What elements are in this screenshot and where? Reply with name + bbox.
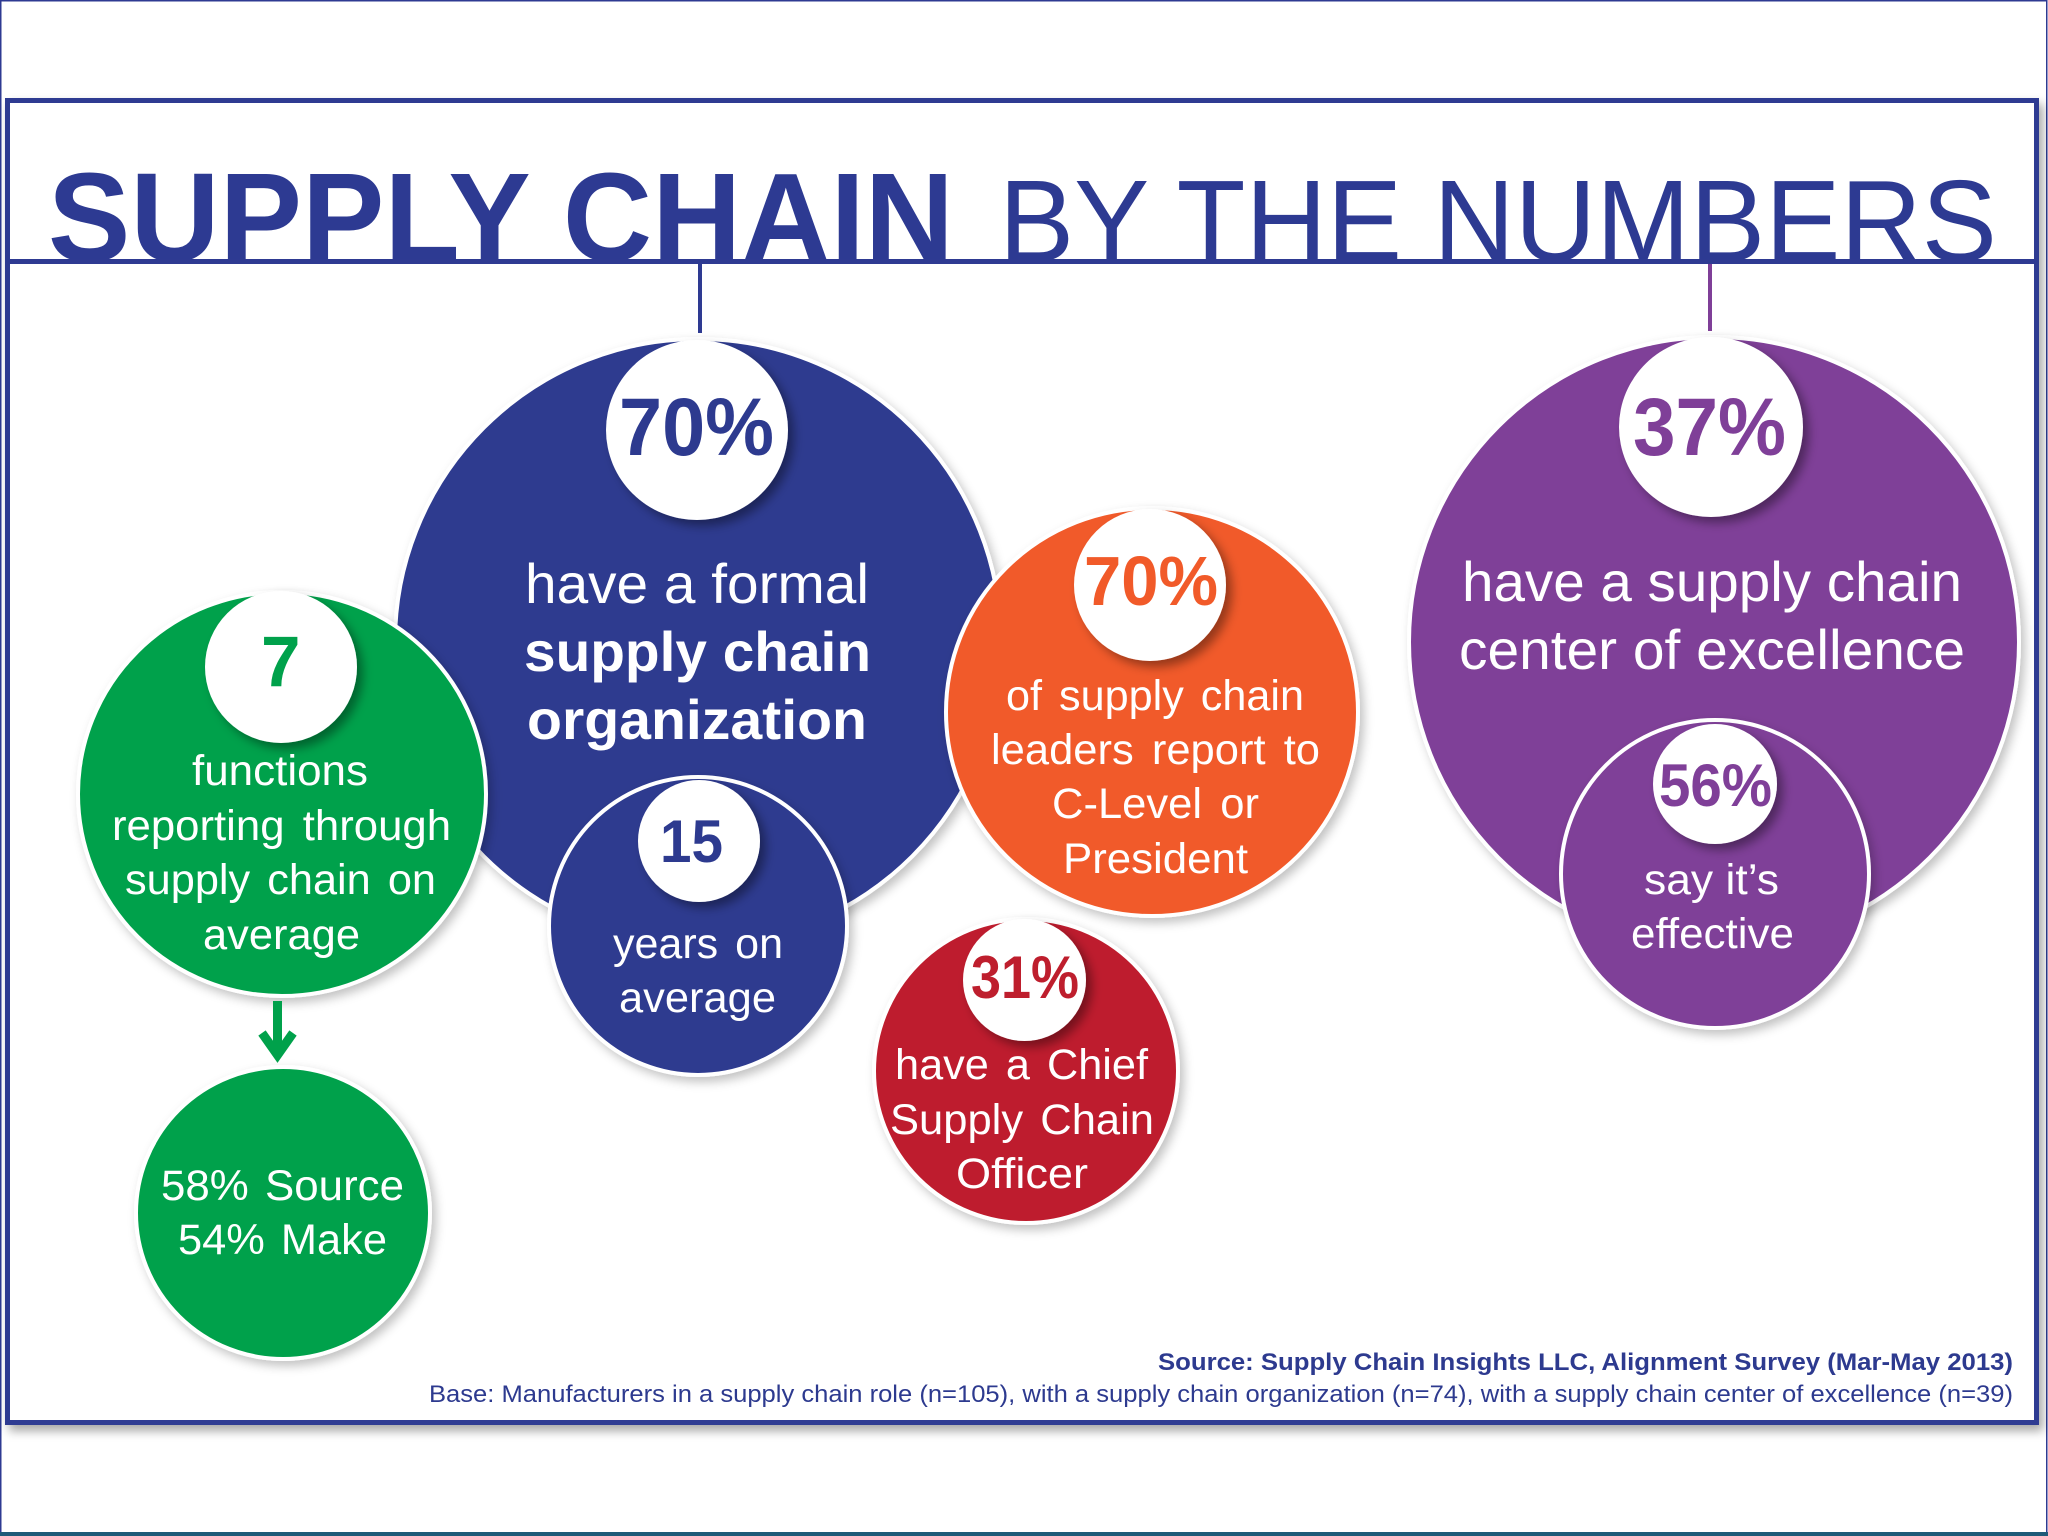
source note: Source: Supply Chain Insights LLC, Alignment Survey (Mar-May 2013) <box>1158 1349 2013 1376</box>
badge: 70%: 70% <box>1084 542 1218 620</box>
text: years on average <box>613 920 783 1022</box>
badge: 31%: 31% <box>971 944 1079 1011</box>
text: have a Chief Supply Chain Officer <box>890 1041 1154 1198</box>
panel: 70% report to C-Level <box>946 508 1358 916</box>
panel: 7 functions reporting <box>78 591 486 996</box>
connector: blue <box>698 264 702 333</box>
text: have a Chief Supply Chain Officer: Officer <box>956 1150 1088 1198</box>
badge: 70% <box>1074 509 1226 661</box>
text: say it's effective: say it’s <box>1644 856 1779 904</box>
title: BY THE NUMBERS <box>999 156 1997 286</box>
panel: 58% Source 54% Make <box>136 1067 430 1359</box>
text: years on average: average <box>619 974 776 1022</box>
text: of supply chain leaders report to C-Level or President <box>991 672 1320 883</box>
text: functions reporting through supply chain on average: average <box>203 911 360 959</box>
badge: 31% <box>963 919 1086 1041</box>
source note <box>429 1349 2013 1408</box>
source note: Base: Manufacturers in a supply chain role (n=105), with a supply chain organization (n=74), with a supply chain center of excellence (n=39) <box>429 1381 2013 1408</box>
text: have a supply chain center of excellence: have a supply chain <box>1462 550 1962 613</box>
text: have a supply chain center of excellence <box>1459 550 1965 681</box>
badge: 7 <box>205 591 357 743</box>
badge: 56%: 56% <box>1659 752 1772 819</box>
panel: 37% center of excellence <box>1409 337 2019 947</box>
badge: 70% <box>606 340 788 520</box>
text: say it's effective <box>1631 856 1794 958</box>
text: have a formal supply chain organization: organization <box>527 688 867 751</box>
title <box>52 172 1992 259</box>
text: have a Chief Supply Chain Officer: Supply Chain <box>890 1096 1154 1144</box>
text: 58% Source 54% Make <box>161 1162 404 1264</box>
connector: purple <box>1708 264 1712 331</box>
text: 58% Source 54% Make: 58% Source <box>161 1162 404 1210</box>
badge: 56% <box>1653 724 1777 844</box>
panel: 31% Chief Supply Chain Officer <box>874 919 1178 1223</box>
text: have a formal supply chain organization: supply chain <box>524 620 871 683</box>
text: of supply chain leaders report to C-Level or President: C-Level or <box>1052 780 1259 828</box>
text: have a supply chain center of excellence: center of excellence <box>1459 618 1965 681</box>
text: have a formal supply chain organization: have a formal <box>525 552 869 615</box>
text: functions reporting through supply chain on average: supply chain on <box>125 856 436 904</box>
badge: 15 <box>638 780 760 902</box>
badge: 37% <box>1619 337 1803 517</box>
text: have a Chief Supply Chain Officer: have a Chief <box>895 1041 1149 1089</box>
badge: 7: 7 <box>261 623 300 702</box>
panel: 15 years on average <box>549 777 847 1075</box>
title rule <box>8 259 2037 264</box>
text: functions reporting through supply chain on average: functions <box>192 747 368 795</box>
badge: 70%: 70% <box>619 382 774 473</box>
text: have a formal supply chain organization <box>524 552 871 751</box>
text: functions reporting through supply chain on average <box>112 747 451 959</box>
text: 58% Source 54% Make: 54% Make <box>178 1216 387 1264</box>
badge: 15: 15 <box>660 808 723 875</box>
text: of supply chain leaders report to C-Level or President: leaders report to <box>991 726 1320 774</box>
text: of supply chain leaders report to C-Level or President: of supply chain <box>1006 672 1304 720</box>
text: years on average: years on <box>613 920 783 968</box>
text: of supply chain leaders report to C-Level or President: President <box>1063 835 1248 883</box>
arrow: green down <box>262 1001 293 1056</box>
text: functions reporting through supply chain on average: reporting through <box>112 802 451 850</box>
text: say it's effective: effective <box>1631 910 1794 958</box>
panel: 70% formal supply chain organization <box>395 339 1001 945</box>
badge: 37%: 37% <box>1633 382 1786 473</box>
title: SUPPLY CHAIN <box>48 147 954 288</box>
panel: 56% say it's effective <box>1561 720 1869 1028</box>
